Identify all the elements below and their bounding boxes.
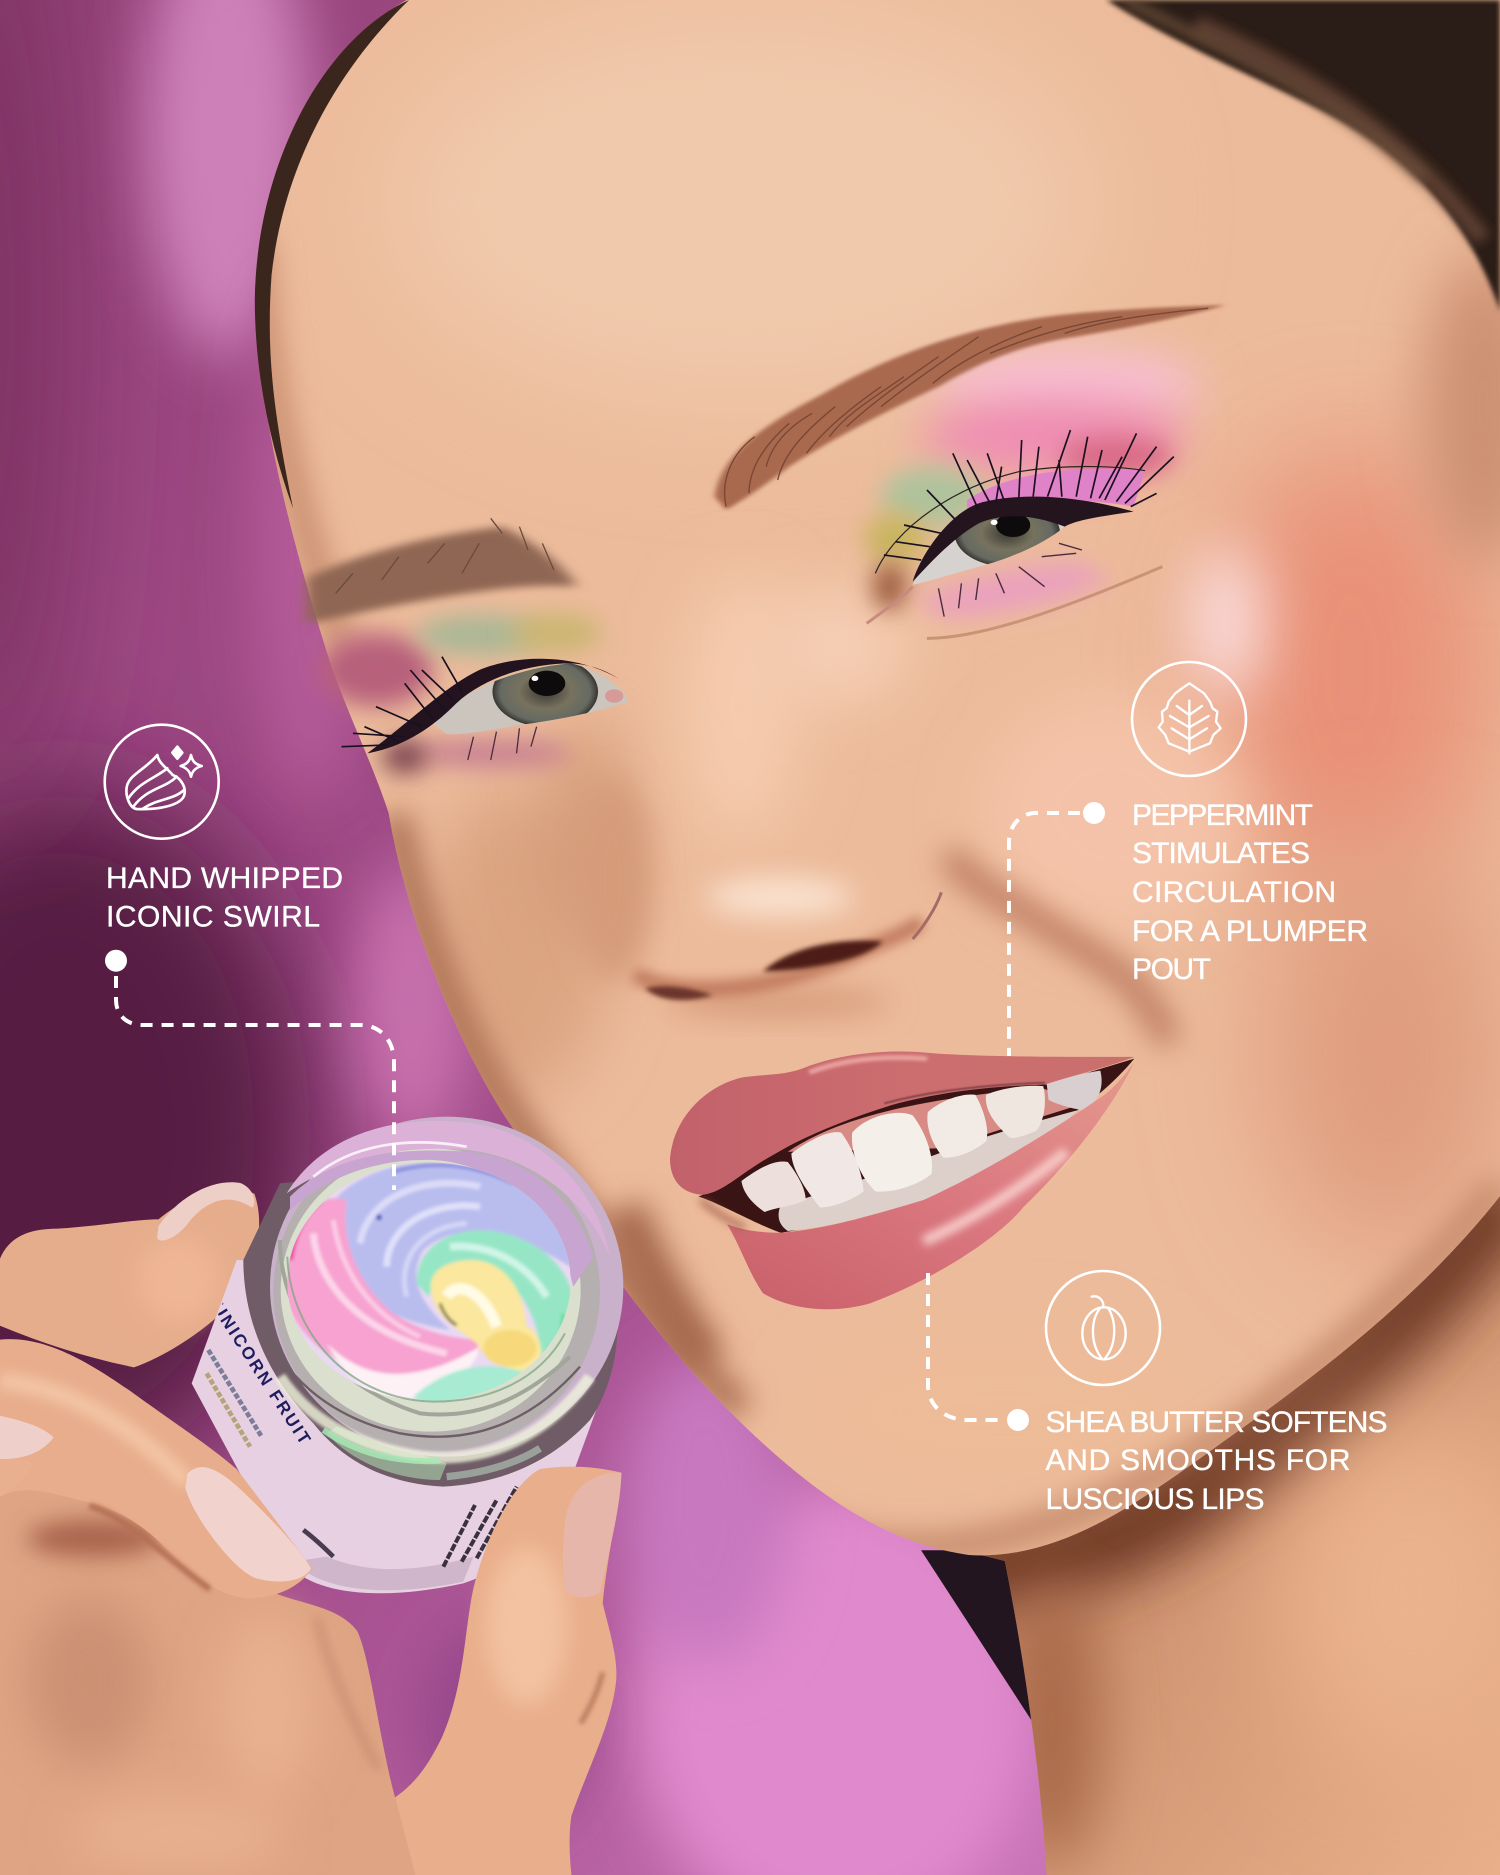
text: peppermint benefit: POUT bbox=[1132, 953, 1211, 986]
smile crease bbox=[947, 854, 1170, 1043]
palm bbox=[0, 1474, 429, 1875]
hair: left edge bbox=[255, 0, 409, 508]
middle finger with nail bbox=[0, 1339, 313, 1598]
icon: whipped cream swirl bbox=[105, 725, 219, 839]
hand: fingers behind jar bbox=[0, 1182, 429, 1875]
callout: hand whipped iconic swirl bbox=[105, 725, 394, 1190]
callout: peppermint bbox=[1009, 662, 1368, 1056]
whipped rainbow swirl bbox=[287, 1162, 571, 1401]
heading: hand whipped iconic swirl: HAND WHIPPED bbox=[106, 862, 343, 895]
leader dot bbox=[1007, 1409, 1029, 1431]
thumb with nail bbox=[395, 1467, 621, 1875]
mouth interior bbox=[699, 1059, 1134, 1233]
text: peppermint benefit: CIRCULATION bbox=[1132, 876, 1336, 909]
dashed leader line to lips bbox=[1009, 813, 1080, 1056]
leader dot bbox=[1083, 802, 1105, 824]
eyes and brows bbox=[307, 305, 1225, 773]
eyeshadow: left eye bbox=[319, 613, 603, 773]
eye socket and nose-side shading bbox=[543, 718, 629, 933]
glass shoulder bbox=[243, 1167, 617, 1487]
icon: mint leaf bbox=[1132, 662, 1246, 776]
eyeshadow: right eye bbox=[864, 350, 1202, 638]
shadow at mouth corner bbox=[700, 1200, 745, 1228]
eyebrow: right bbox=[715, 305, 1225, 510]
hair: top right bbox=[1106, 0, 1500, 311]
lower lip bbox=[727, 1062, 1134, 1309]
dashed leader line to jar bbox=[116, 976, 394, 1190]
eye: left bbox=[341, 657, 628, 760]
eye: right bbox=[867, 430, 1174, 623]
text: peppermint benefit: STIMULATES bbox=[1132, 837, 1310, 870]
teeth bbox=[741, 1071, 1102, 1231]
leader dot bbox=[105, 950, 127, 972]
hand: fingers in front of jar bbox=[0, 1339, 621, 1875]
printed label rules bbox=[207, 1350, 517, 1567]
index finger bbox=[0, 1182, 259, 1367]
glass rim bbox=[270, 1117, 623, 1457]
nose bbox=[572, 778, 941, 1018]
face bbox=[268, 0, 1500, 1556]
text: shea butter benefit: AND SMOOTHS FOR bbox=[1046, 1444, 1350, 1477]
neck shadow gap bbox=[921, 1550, 1041, 1734]
product name on label: UNICORN FRUIT bbox=[208, 1299, 316, 1450]
text: peppermint benefit: PEPPERMINT bbox=[1132, 799, 1313, 832]
text: shea butter benefit: LUSCIOUS LIPS bbox=[1046, 1483, 1264, 1516]
text: shea butter benefit: SHEA BUTTER SOFTENS bbox=[1046, 1406, 1388, 1439]
text: peppermint benefit: FOR A PLUMPER bbox=[1132, 915, 1368, 948]
icon: shea nut bbox=[1046, 1271, 1160, 1385]
neck bbox=[982, 1196, 1500, 1875]
jar body with label bbox=[192, 1260, 613, 1593]
eyebrow: left bbox=[307, 518, 577, 623]
upper lip bbox=[670, 1051, 1134, 1195]
dashed leader line to lips bbox=[928, 1273, 1005, 1420]
product jar bbox=[192, 1117, 623, 1593]
mouth bbox=[670, 1051, 1134, 1309]
gums bbox=[788, 1088, 1084, 1152]
heading: hand whipped iconic swirl: ICONIC SWIRL bbox=[106, 900, 320, 934]
callout: shea butter bbox=[928, 1271, 1388, 1516]
